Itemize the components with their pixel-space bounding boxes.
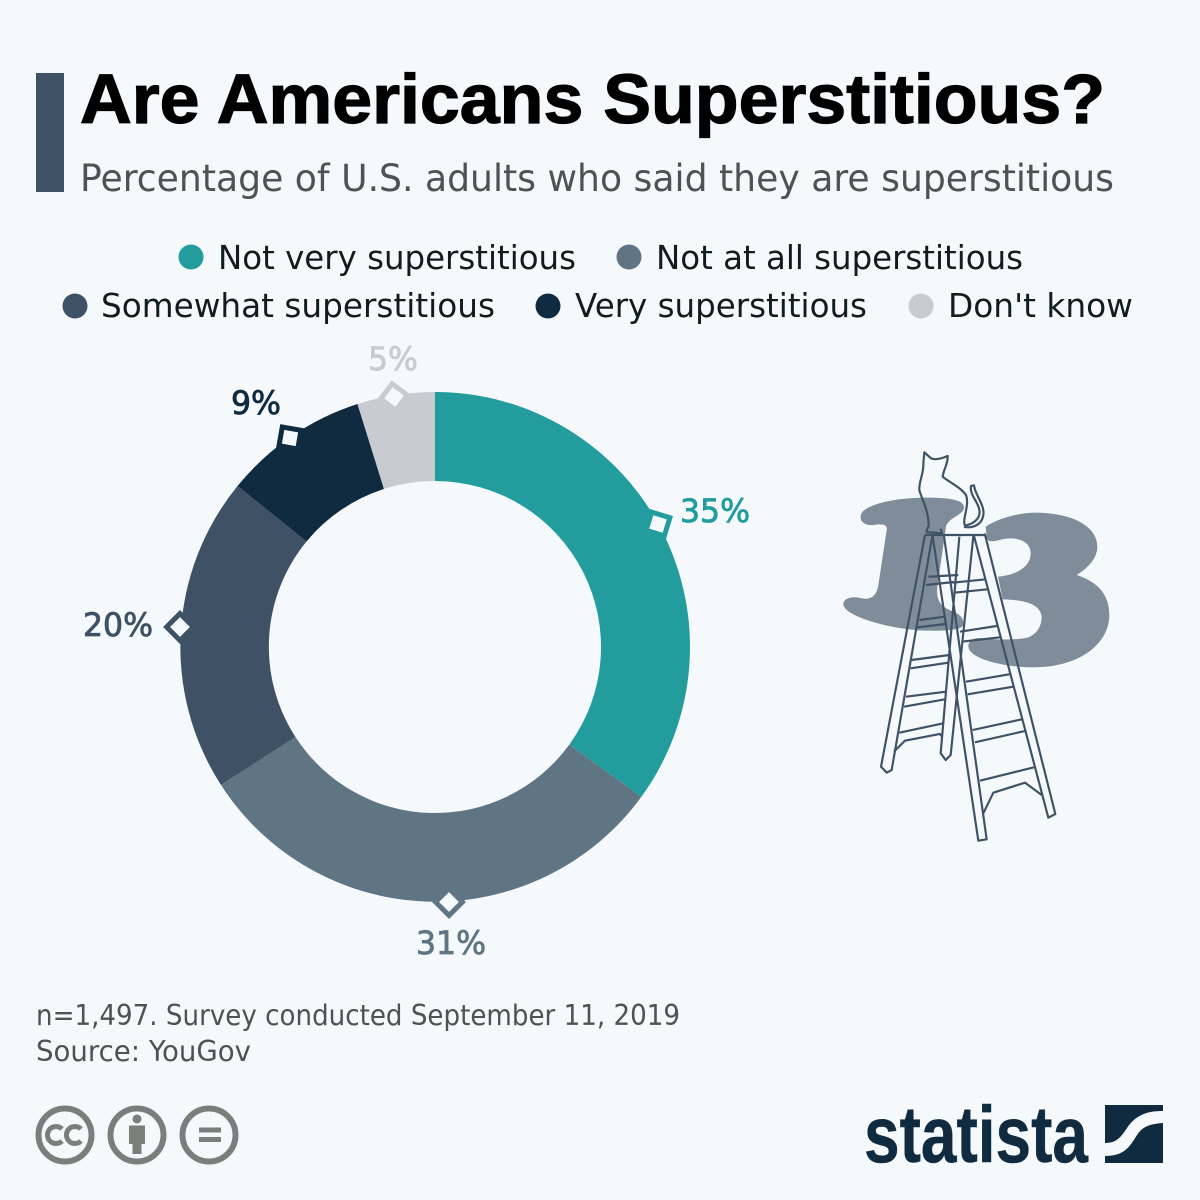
title accent bar — [36, 73, 64, 192]
title: Are Americans Superstitious? — [80, 60, 1105, 138]
segment: Somewhat superstitious 20% — [180, 486, 306, 785]
value label: 31%: 31% — [416, 924, 486, 962]
legend item: Somewhat superstitious: Somewhat superstitious — [101, 286, 495, 325]
legend item: Not at all superstitious: Not at all superstitious — [656, 238, 1023, 277]
marker: 35% — [643, 509, 673, 539]
value label: 35%: 35% — [680, 492, 750, 530]
segment: Not at all superstitious 31% — [221, 737, 641, 902]
legend item: Very superstitious: Very superstitious — [575, 286, 867, 325]
icon: no derivatives — [182, 1108, 236, 1162]
ladder — [881, 534, 1055, 841]
cat outline — [919, 452, 984, 533]
value label: 5%: 5% — [368, 340, 418, 378]
segment: Not very superstitious 35% — [435, 392, 690, 797]
segment: Very superstitious 9% — [238, 404, 384, 542]
segment: Don't know 5% — [358, 392, 435, 489]
statista logo mark — [1105, 1105, 1163, 1163]
marker: 20% — [163, 610, 197, 644]
legend item: Don't know: Don't know — [948, 286, 1133, 325]
statista wordmark: statista — [864, 1090, 1088, 1179]
marker: 31% — [432, 885, 466, 919]
digit 1 — [843, 498, 964, 631]
value label: 9%: 9% — [231, 384, 281, 422]
value label: 20%: 20% — [83, 606, 153, 644]
icon: creative commons — [38, 1108, 92, 1162]
legend — [62, 238, 1133, 325]
marker: 9% — [276, 424, 304, 452]
digit 3 — [968, 513, 1109, 667]
icon: attribution — [110, 1108, 164, 1162]
legend item: Not very superstitious: Not very superstitious — [218, 238, 576, 277]
subtitle: Percentage of U.S. adults who said they are superstitious — [80, 157, 1114, 200]
source line: Source: YouGov — [36, 1035, 251, 1068]
illustration: cat on a ladder in front of number 13 — [843, 452, 1109, 841]
marker: 5% — [377, 380, 411, 414]
donut chart — [180, 392, 690, 902]
source note: n=1,497. Survey conducted September 11, 2019 — [36, 999, 680, 1032]
